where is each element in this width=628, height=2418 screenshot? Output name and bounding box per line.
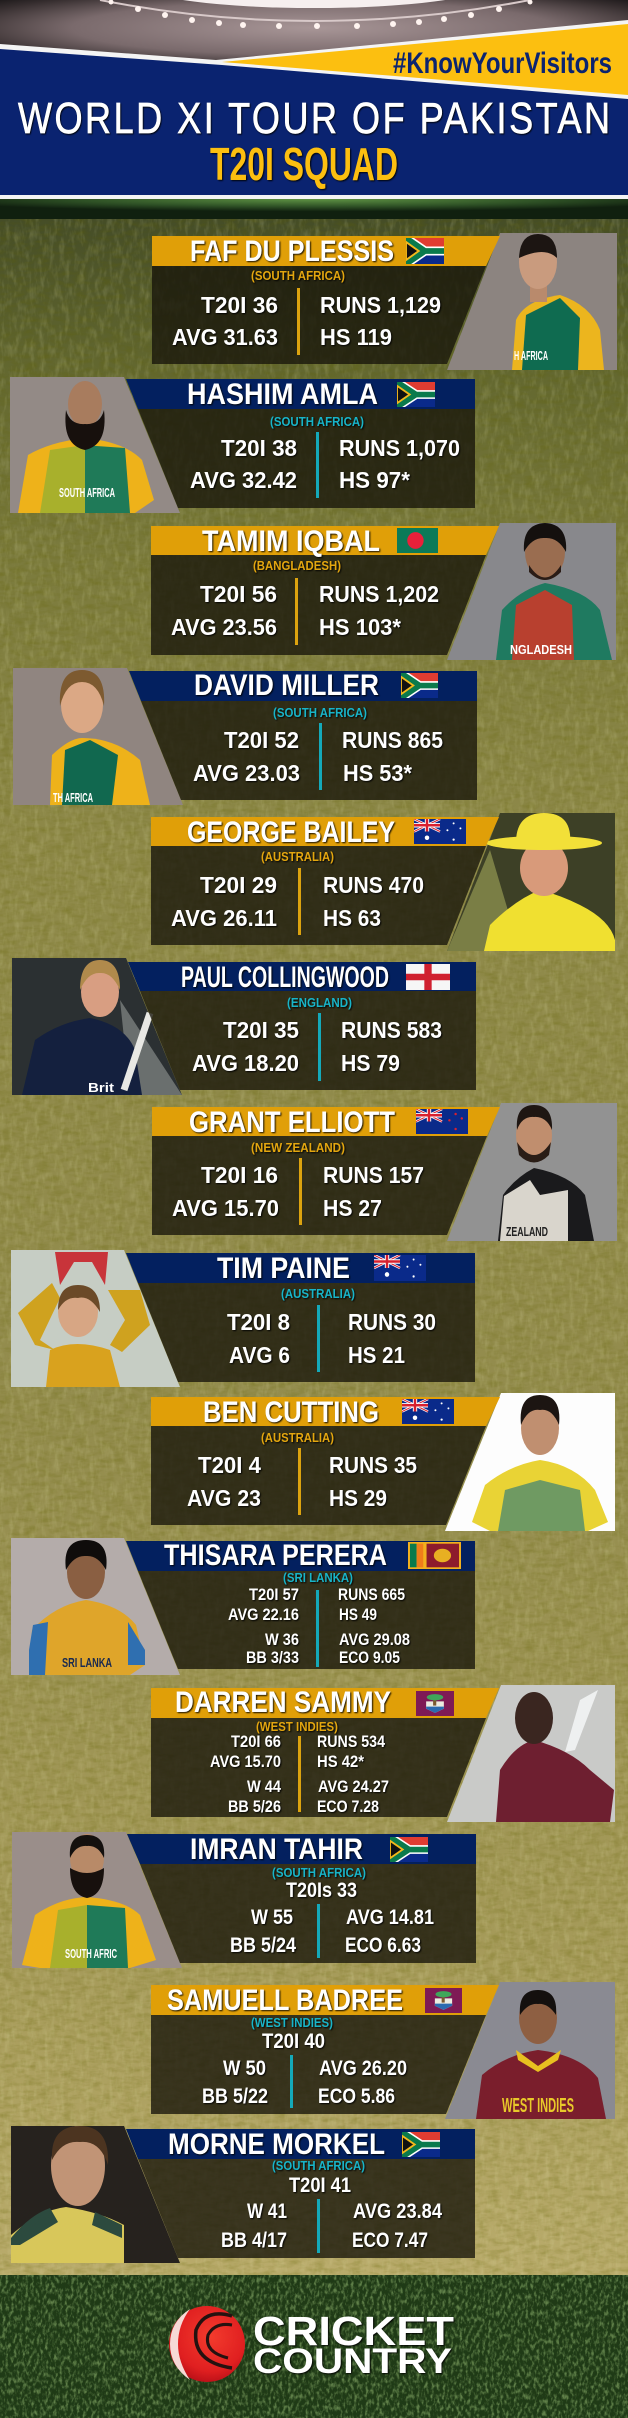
flag — [406, 964, 450, 990]
flag — [406, 238, 444, 264]
text — [187, 1396, 417, 1511]
photo: H AFRICA — [514, 348, 548, 363]
player card: Thisara Perera — [11, 1538, 475, 1675]
text: (WEST INDIES) — [256, 1720, 338, 1734]
title: WORLD XI TOUR OF PAKISTAN — [18, 94, 610, 143]
divider — [297, 288, 300, 355]
body — [151, 555, 486, 655]
text: RUNS 157 — [323, 1162, 424, 1188]
text: HS 21 — [348, 1342, 405, 1368]
text: SAMUELL BADREE — [167, 1984, 403, 2017]
text: HS 119 — [320, 324, 392, 350]
text: BB 3/33 — [246, 1648, 299, 1667]
text: HS 79 — [341, 1050, 400, 1076]
text: IMRAN TAHIR — [190, 1833, 363, 1866]
text — [171, 816, 424, 931]
text — [172, 1106, 424, 1221]
text: (AUSTRALIA) — [281, 1287, 355, 1301]
navy banner — [0, 49, 628, 195]
divider — [298, 1736, 301, 1812]
text: AVG 15.70 — [210, 1752, 281, 1771]
text — [217, 1252, 436, 1368]
text: T20I 16 — [201, 1162, 278, 1188]
header — [151, 817, 499, 846]
text: T20I 41 — [289, 2174, 351, 2197]
text: AVG 32.42 — [190, 467, 297, 493]
text: T20I 4 — [198, 1452, 261, 1478]
text: HS 53* — [343, 760, 413, 786]
text: RUNS 1,070 — [339, 435, 460, 461]
text — [171, 525, 439, 640]
photo — [445, 1982, 615, 2119]
photo — [12, 958, 182, 1095]
text: RUNS 30 — [348, 1309, 436, 1335]
player card: Hashim Amla — [10, 377, 475, 513]
text: W 44 — [247, 1777, 281, 1796]
text: AVG 29.08 — [339, 1630, 410, 1649]
body — [151, 846, 486, 945]
photo — [447, 523, 616, 660]
text: ECO 6.63 — [345, 1934, 421, 1957]
header — [128, 962, 476, 991]
text: T20I 8 — [227, 1309, 290, 1335]
header — [126, 1253, 475, 1283]
divider — [318, 1013, 321, 1081]
text: (SOUTH AFRICA) — [270, 415, 364, 429]
body — [151, 1718, 486, 1817]
text: AVG 23.56 — [171, 614, 277, 640]
text: T20Is 33 — [286, 1879, 357, 1902]
header — [151, 1985, 499, 2015]
text: (SOUTH AFRICA) — [273, 706, 367, 720]
photo — [12, 1832, 182, 1968]
divider — [317, 2199, 320, 2253]
text: (AUSTRALIA) — [261, 850, 334, 864]
text: AVG 26.11 — [171, 905, 277, 931]
player card: Ben Cutting — [151, 1393, 615, 1531]
flag — [397, 528, 438, 553]
text: AVG 22.16 — [228, 1605, 299, 1624]
text: T20I 57 — [249, 1585, 299, 1604]
text: (AUSTRALIA) — [261, 1431, 334, 1445]
text: HASHIM AMLA — [187, 378, 378, 411]
body — [138, 409, 475, 508]
text: DAVID MILLER — [194, 669, 379, 702]
photo — [13, 668, 183, 805]
stadium roof with floodlights — [0, 0, 628, 70]
photo: ZEALAND — [506, 1224, 548, 1239]
text — [193, 669, 443, 786]
header — [152, 236, 500, 266]
flag — [425, 1988, 462, 2013]
body — [151, 1426, 486, 1525]
text: RUNS 1,129 — [320, 292, 441, 318]
text: AVG 18.20 — [192, 1050, 299, 1076]
photo — [11, 1250, 180, 1387]
photo — [445, 1393, 615, 1531]
text: HS 29 — [329, 1485, 387, 1511]
text: AVG 23 — [187, 1485, 261, 1511]
text: RUNS 665 — [338, 1585, 405, 1604]
text — [181, 961, 442, 1076]
text: (SRI LANKA) — [283, 1571, 353, 1585]
photo: NGLADESH — [510, 642, 572, 657]
text: ECO 9.05 — [339, 1648, 400, 1667]
text — [172, 235, 441, 350]
body — [138, 1571, 475, 1669]
photo — [447, 233, 617, 370]
photo: TH AFRICA — [53, 790, 93, 805]
text: (SOUTH AFRICA) — [251, 269, 345, 283]
text: HS 42* — [317, 1752, 364, 1771]
player card: Grant Elliott — [152, 1103, 617, 1241]
text: (SOUTH AFRICA) — [272, 1866, 366, 1880]
wordmark: CRICKET — [253, 2308, 454, 2354]
text: (ENGLAND) — [287, 996, 352, 1010]
photo: Brit — [88, 1080, 115, 1095]
Cricket Country ball logo — [169, 2306, 245, 2382]
flag — [401, 673, 438, 698]
flag — [416, 1691, 454, 1716]
text: (NEW ZEALAND) — [251, 1141, 345, 1155]
photo — [10, 377, 180, 513]
player card: Samuell Badree — [151, 1982, 615, 2119]
text: TIM PAINE — [217, 1252, 350, 1285]
header — [127, 1834, 476, 1864]
text: RUNS 865 — [342, 727, 443, 753]
divider — [298, 1448, 301, 1515]
text: DARREN SAMMY — [175, 1686, 391, 1719]
divider — [299, 1158, 302, 1225]
header — [126, 379, 475, 409]
text: T20I 36 — [201, 292, 278, 318]
text: ECO 5.86 — [318, 2085, 395, 2108]
player card: David Miller — [13, 668, 477, 805]
divider — [316, 432, 319, 498]
divider — [319, 723, 322, 790]
body — [141, 701, 477, 800]
text: HS 49 — [339, 1605, 377, 1624]
player card: Morne Morkel — [11, 2126, 475, 2263]
body — [138, 1283, 475, 1382]
flag — [374, 1255, 426, 1281]
text — [167, 1984, 407, 2108]
text: T20I 29 — [200, 872, 277, 898]
text: (SOUTH AFRICA) — [272, 2159, 365, 2173]
text: W 55 — [251, 1906, 293, 1929]
text: T20I 38 — [221, 435, 297, 461]
text: HS 63 — [323, 905, 381, 931]
text: BB 5/26 — [228, 1797, 281, 1816]
subtitle: T20I SQUAD — [210, 138, 398, 190]
text — [164, 1539, 410, 1667]
text — [175, 1686, 391, 1816]
flag — [416, 1109, 468, 1134]
header — [152, 1107, 500, 1136]
header — [151, 526, 499, 555]
wordmark — [253, 2308, 454, 2381]
text: T20I 52 — [224, 727, 299, 753]
player card: Tim Paine — [11, 1250, 475, 1387]
text: AVG 23.84 — [353, 2200, 442, 2223]
text: BB 5/24 — [230, 1934, 296, 1957]
text: AVG 6 — [229, 1342, 290, 1368]
text: AVG 26.20 — [319, 2057, 407, 2080]
text: (BANGLADESH) — [253, 559, 341, 573]
player card: Paul Collingwood — [12, 958, 476, 1095]
text: GRANT ELLIOTT — [189, 1106, 395, 1139]
text: W 36 — [265, 1630, 299, 1649]
divider — [295, 578, 298, 645]
flag — [390, 1837, 428, 1862]
text: AVG 14.81 — [346, 1906, 434, 1929]
player card: Darren Sammy — [151, 1685, 615, 1822]
divider — [317, 1904, 320, 1958]
header — [126, 1541, 475, 1571]
text: GEORGE BAILEY — [187, 816, 395, 849]
text — [187, 378, 460, 493]
text: RUNS 35 — [329, 1452, 417, 1478]
text: HS 103* — [319, 614, 402, 640]
flag — [408, 1542, 461, 1569]
header — [151, 1397, 500, 1426]
header — [129, 671, 477, 701]
text: RUNS 583 — [341, 1017, 442, 1043]
photo — [447, 813, 615, 951]
divider — [316, 1590, 319, 1667]
header banner — [0, 0, 628, 219]
text: (WEST INDIES) — [251, 2016, 333, 2030]
player card: Imran Tahir — [12, 1832, 476, 1968]
text: W 50 — [223, 2057, 266, 2080]
text: AVG 24.27 — [318, 1777, 389, 1796]
player card: Faf du Plessis — [152, 233, 617, 370]
flag — [402, 1399, 454, 1424]
text: BB 5/22 — [202, 2085, 268, 2108]
header — [126, 2129, 475, 2159]
text: HS 97* — [339, 467, 411, 493]
divider — [290, 2055, 293, 2108]
text: RUNS 1,202 — [319, 581, 439, 607]
text: T20I 40 — [262, 2030, 325, 2053]
white chevron stripe — [0, 20, 628, 102]
text: W 41 — [247, 2200, 287, 2223]
text: BEN CUTTING — [203, 1396, 379, 1429]
player card: George Bailey — [151, 813, 615, 951]
text: MORNE MORKEL — [168, 2128, 385, 2161]
text: ECO 7.47 — [352, 2229, 428, 2252]
text: RUNS 470 — [323, 872, 424, 898]
text — [190, 1833, 434, 1957]
text: ECO 7.28 — [317, 1797, 379, 1816]
body — [140, 1864, 476, 1963]
player card: Tamim Iqbal — [151, 523, 616, 660]
body — [152, 266, 486, 364]
flag — [397, 382, 435, 407]
text: TAMIM IQBAL — [202, 525, 380, 558]
divider — [298, 868, 301, 935]
photo: SRI LANKA — [62, 1655, 112, 1670]
wordmark: COUNTRY — [253, 2342, 452, 2381]
photo — [447, 1685, 615, 1822]
text: PAUL COLLINGWOOD — [181, 961, 389, 994]
body — [151, 2015, 486, 2114]
body — [140, 991, 476, 1090]
text: T20I 35 — [223, 1017, 299, 1043]
flag — [402, 2132, 440, 2157]
text: T20I 56 — [200, 581, 277, 607]
text: HS 27 — [323, 1195, 382, 1221]
text: AVG 31.63 — [172, 324, 278, 350]
text: AVG 23.03 — [193, 760, 300, 786]
photo: SOUTH AFRIC — [65, 1946, 117, 1961]
photo — [11, 2126, 180, 2263]
photo — [447, 1103, 617, 1241]
text: THISARA PERERA — [164, 1539, 387, 1572]
flag — [414, 819, 466, 844]
divider — [317, 1305, 320, 1372]
yellow hashtag ribbon — [222, 24, 628, 95]
text: AVG 15.70 — [172, 1195, 279, 1221]
photo: SOUTH AFRICA — [59, 485, 115, 500]
header — [151, 1688, 499, 1718]
text: RUNS 534 — [317, 1732, 385, 1751]
text: FAF DU PLESSIS — [190, 235, 394, 268]
text: BB 4/17 — [221, 2229, 287, 2252]
footer grass with logo — [0, 2275, 628, 2418]
body — [138, 2159, 475, 2258]
text: T20I 66 — [231, 1732, 281, 1751]
body — [152, 1136, 487, 1235]
photo — [11, 1538, 180, 1675]
text — [168, 2128, 442, 2252]
